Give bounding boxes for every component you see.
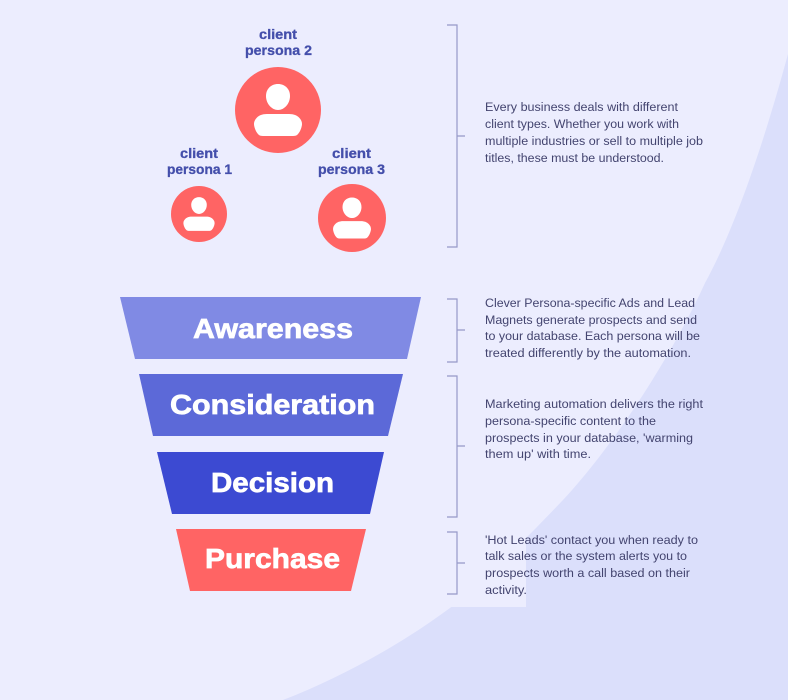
funnel: consideration: Consideration <box>170 389 375 420</box>
text: purchase: activity. <box>485 583 527 597</box>
funnel: awareness <box>120 297 421 359</box>
persona 1: client <box>180 145 218 161</box>
funnel: purchase: Purchase <box>205 543 340 574</box>
text: personas: multiple industries or sell to multiple job <box>485 134 703 148</box>
text: consideration and decision <box>485 397 704 461</box>
text: purchase <box>485 533 698 597</box>
persona 2: client <box>259 26 297 42</box>
funnel: consideration <box>139 374 403 436</box>
text: personas: titles, these must be understood. <box>485 151 664 165</box>
bracket: purchase <box>447 532 465 594</box>
persona 3: client <box>332 145 371 161</box>
persona 3 <box>318 145 386 252</box>
text: awareness <box>485 296 700 360</box>
funnel: decision: Decision <box>211 467 334 498</box>
persona 3: persona 3 <box>318 161 385 177</box>
text: consideration and decision: persona-specific content to the <box>485 414 656 428</box>
bracket: consideration and decision <box>447 376 465 517</box>
funnel: decision <box>157 452 384 514</box>
text: consideration and decision: Marketing automation delivers the right <box>485 397 704 411</box>
text: personas <box>485 100 703 165</box>
background light patch <box>447 530 526 607</box>
bracket: awareness <box>447 299 465 362</box>
text: personas: Every business deals with different <box>485 100 679 114</box>
text: purchase: 'Hot Leads' contact you when ready to <box>485 533 698 547</box>
bracket: personas <box>447 25 465 247</box>
text: awareness: to your database. Each persona will be <box>485 329 700 343</box>
persona 1: persona 1 <box>167 161 232 177</box>
text: awareness: Magnets generate prospects and send <box>485 313 697 327</box>
persona 2 <box>235 26 321 153</box>
persona 1 <box>167 145 232 242</box>
text: purchase: prospects worth a call based on their <box>485 566 690 580</box>
text: awareness: Clever Persona-specific Ads and Lead <box>485 296 695 310</box>
text: consideration and decision: prospects in your database, 'warming <box>485 431 693 445</box>
text: personas: client types. Whether you work with <box>485 117 679 131</box>
funnel: awareness: Awareness <box>193 313 353 344</box>
background curve <box>283 54 788 700</box>
text: awareness: treated differently by the automation. <box>485 346 691 360</box>
text: purchase: talk sales or the system alerts you to <box>485 549 687 563</box>
persona 2: persona 2 <box>245 42 312 58</box>
text: consideration and decision: them up' with time. <box>485 447 591 461</box>
funnel: purchase <box>176 529 366 591</box>
